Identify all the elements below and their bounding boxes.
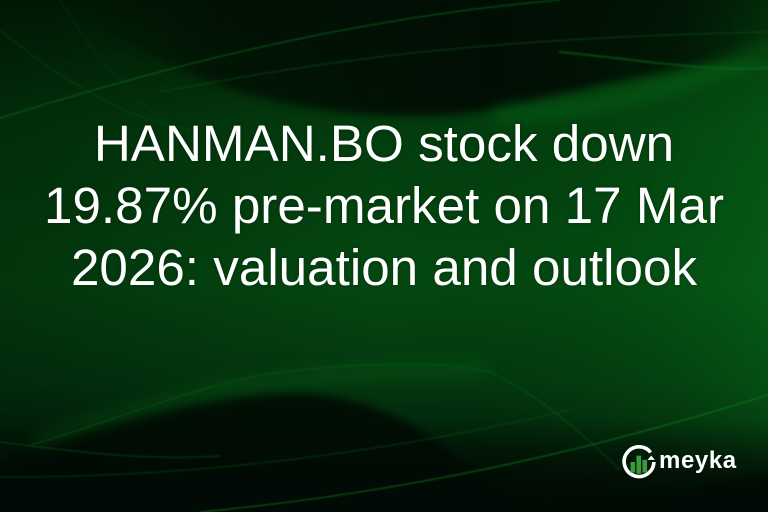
icon: circular chart logo bbox=[622, 445, 656, 478]
title bbox=[44, 115, 724, 296]
wordmark: meyka bbox=[659, 447, 737, 474]
title: 19.87% pre-market on 17 Mar bbox=[44, 177, 724, 234]
title: HANMAN.BO stock down bbox=[94, 115, 674, 172]
bottom dark swoosh bbox=[0, 393, 560, 512]
top dark swoosh bbox=[60, 0, 768, 116]
title: 2026: valuation and outlook bbox=[71, 239, 697, 296]
logo: meyka bbox=[622, 445, 737, 478]
